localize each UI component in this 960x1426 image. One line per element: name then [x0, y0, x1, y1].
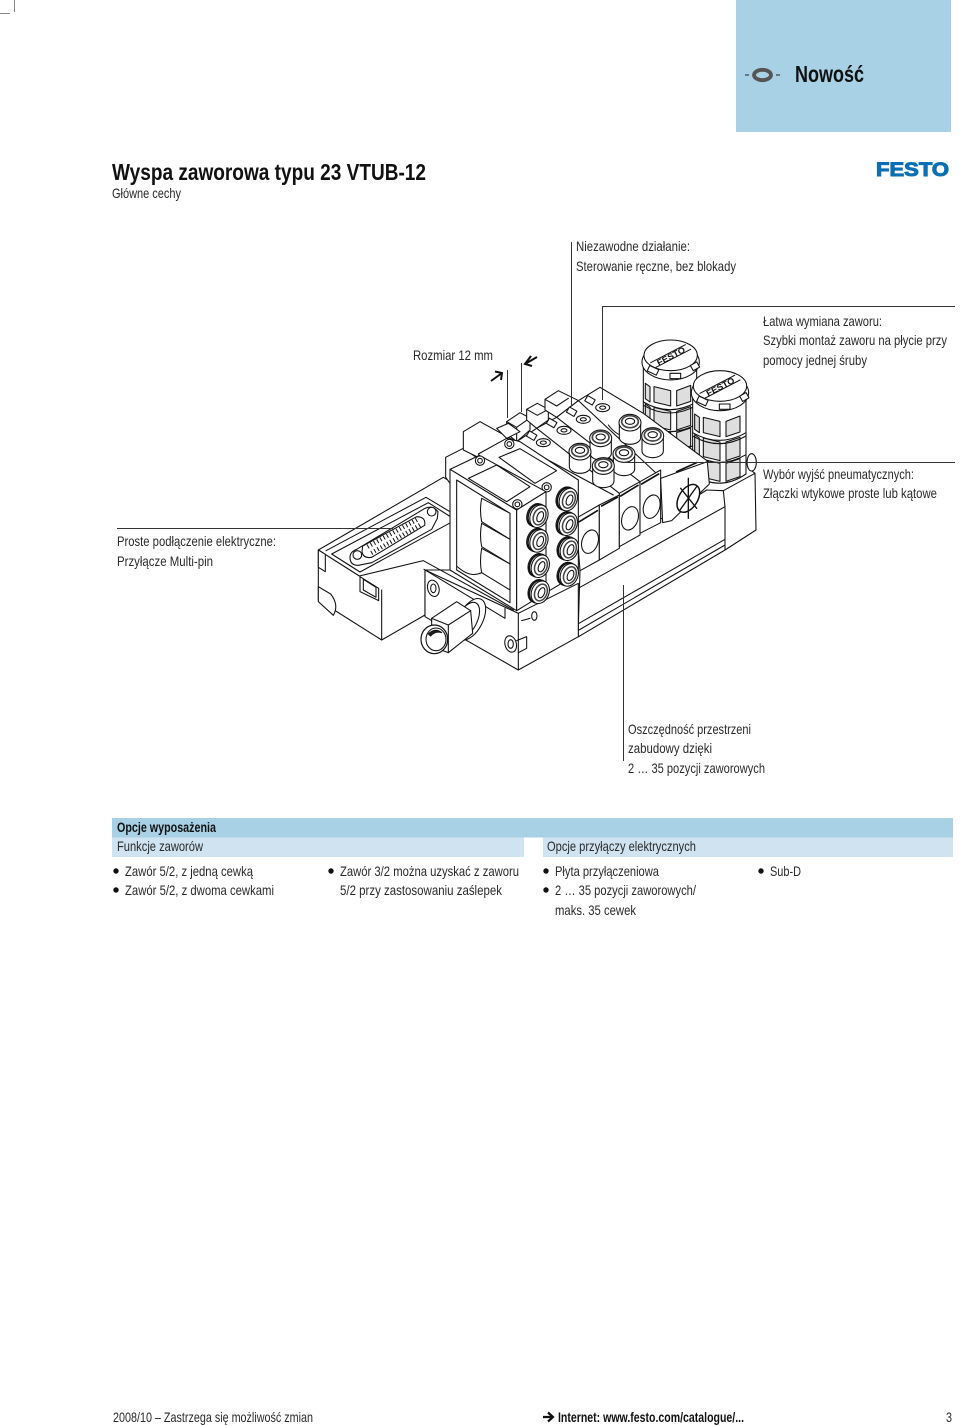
- page number: 3: [946, 1409, 952, 1425]
- side fittings: [523, 484, 582, 606]
- callout: easy valve replacement: pomocy jednej śruby: [763, 352, 867, 368]
- list: connection options 1: 2 … 35 pozycji zaworowych/: [555, 882, 696, 898]
- silencers: FESTO: [704, 375, 737, 398]
- icon: new product oval: [745, 70, 780, 80]
- subheading: valve functions: Funkcje zaworów: [117, 838, 204, 854]
- valve tops: [507, 387, 708, 520]
- callout: electrical connection: Proste podłączenie elektryczne:: [117, 533, 276, 549]
- list: connection options 2: Sub-D: [770, 863, 801, 879]
- list: valve functions 1: Zawór 5/2, z dwoma cewkami: [125, 882, 274, 898]
- list: valve functions 1: [113, 863, 274, 898]
- panel: Nowość badge: [736, 0, 951, 132]
- subheading: electrical connection options: Opcje przyłączy elektrycznych: [547, 838, 696, 854]
- silencers: [642, 340, 756, 483]
- list: connection options 2: [758, 863, 801, 879]
- list: valve functions 1: Zawór 5/2, z jedną cewką: [125, 863, 253, 879]
- subheading: electrical connection options: [543, 838, 953, 857]
- callout: reliable operation: Niezawodne działanie:: [576, 238, 690, 254]
- table heading band: [112, 818, 953, 838]
- list: valve functions 2: 5/2 przy zastosowaniu zaślepek: [340, 882, 503, 898]
- main body: [424, 569, 578, 670]
- callout: easy valve replacement: Łatwa wymiana zaworu:: [763, 313, 882, 329]
- top fittings: [569, 414, 664, 488]
- base rail: [578, 468, 756, 637]
- callout: space saving: [624, 585, 765, 776]
- end plate 1 with window: [450, 455, 546, 611]
- footer: [113, 1409, 952, 1425]
- title: [112, 159, 426, 201]
- title: Główne cechy: [112, 185, 181, 201]
- connector sub-D: [350, 507, 438, 565]
- back plates: [446, 422, 520, 483]
- cable gland: [421, 594, 492, 654]
- rear valve section: [507, 340, 756, 637]
- arrows: width markers: [491, 356, 537, 381]
- panel: equipment options: [112, 818, 953, 918]
- table heading band: Opcje wyposażenia: [117, 819, 216, 835]
- multi-pin housing: [318, 477, 513, 640]
- list: connection options 1: maks. 35 cewek: [555, 902, 637, 918]
- callout: electrical connection: Przyłącze Multi-pin: [117, 553, 213, 569]
- valve front panels: [576, 462, 709, 571]
- footer link: Internet: www.festo.com/catalogue/...: [558, 1409, 744, 1425]
- callout: electrical connection: [117, 528, 393, 569]
- front end section: [318, 422, 582, 670]
- crop marks: [0, 0, 14, 14]
- callout: space saving: 2 … 35 pozycji zaworowych: [628, 760, 765, 776]
- footer date note: 2008/10 – Zastrzega się możliwość zmian: [113, 1409, 313, 1425]
- silencers: FESTO: [655, 344, 687, 368]
- badge label: Nowość: [795, 61, 864, 87]
- callout: pneumatic outputs: [625, 462, 955, 501]
- list: connection options 1: [543, 863, 696, 918]
- title: Wyspa zaworowa typu 23 VTUB-12: [112, 159, 426, 185]
- callout: size 12 mm: [413, 347, 537, 418]
- list: valve functions 2: [328, 863, 519, 898]
- callout: pneumatic outputs: Wybór wyjść pneumatycznych:: [763, 466, 914, 482]
- end plate 2: [478, 438, 578, 593]
- product illustration: valve terminal: [318, 340, 756, 670]
- list: connection options 1: Płyta przyłączeniowa: [555, 863, 659, 879]
- subheading: valve functions: [112, 838, 524, 857]
- callout: reliable operation: Sterowanie ręczne, bez blokady: [576, 258, 736, 274]
- callout: size 12 mm: Rozmiar 12 mm: [413, 347, 493, 363]
- callout: space saving: Oszczędność przestrzeni: [628, 721, 751, 737]
- list: valve functions 2: Zawór 3/2 można uzyskać z zaworu: [340, 863, 519, 879]
- logo: FESTO: FESTO: [876, 159, 949, 181]
- icon: arrow: [543, 1412, 553, 1422]
- callout: easy valve replacement: [602, 306, 955, 400]
- callout: reliable operation: [572, 238, 736, 406]
- callout: space saving: zabudowy dzięki: [628, 740, 712, 756]
